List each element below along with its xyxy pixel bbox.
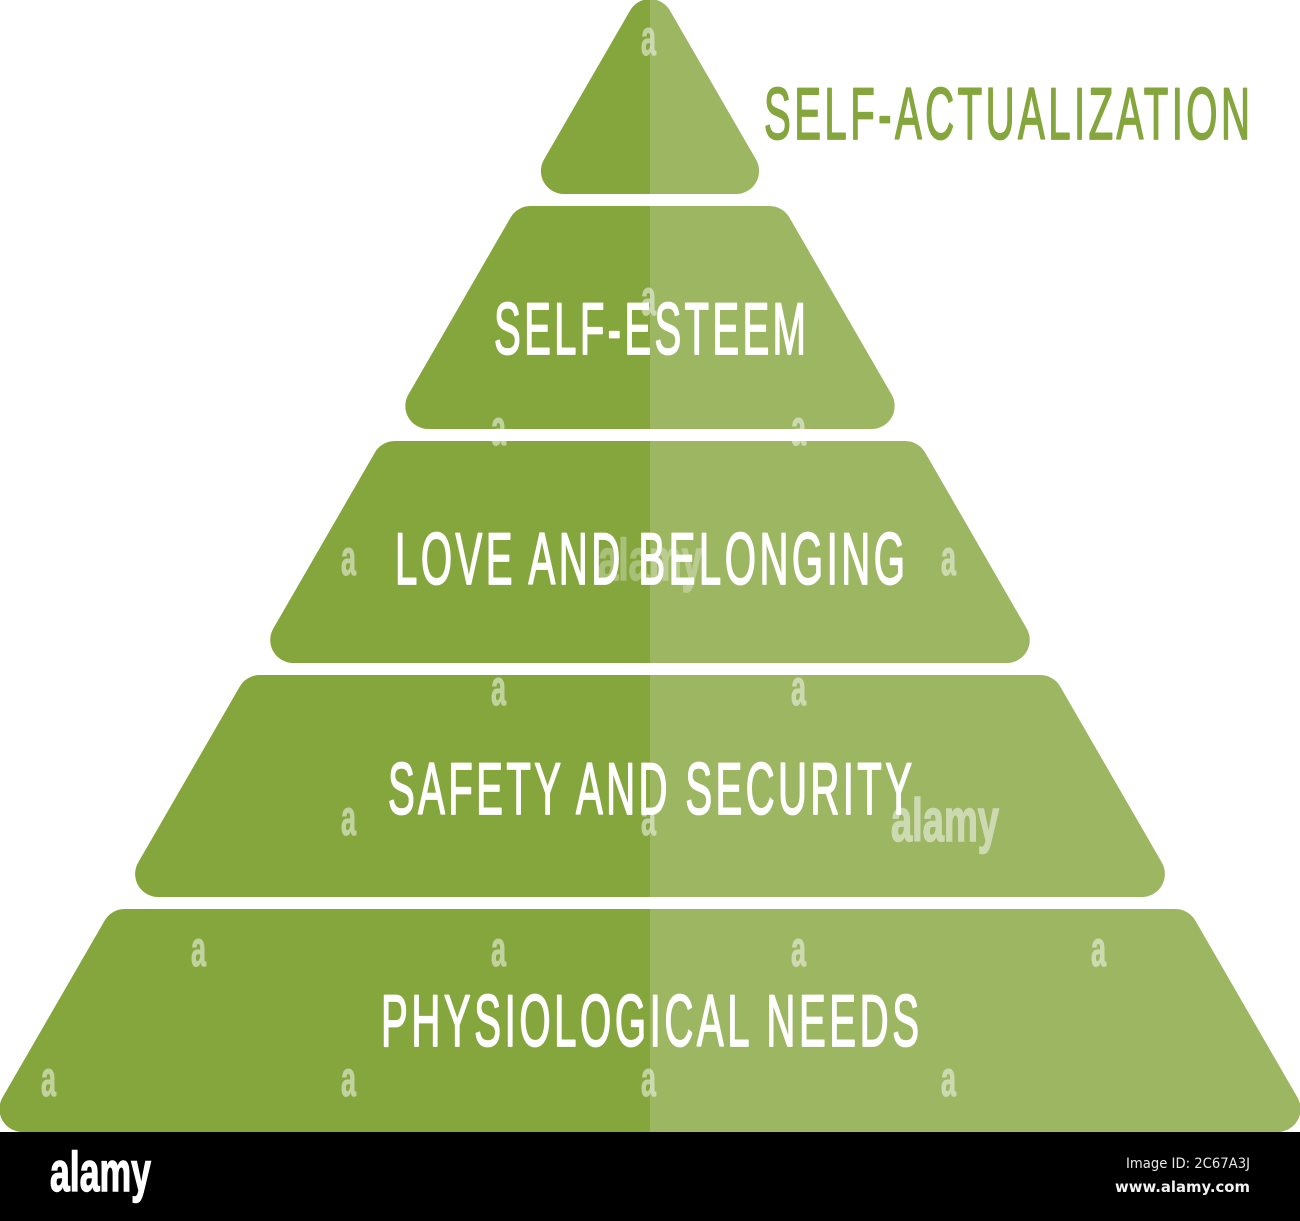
watermark pattern: a [641,10,657,66]
watermark pattern: a [791,400,807,456]
watermark pattern: a [491,400,507,456]
watermark pattern: a [641,270,657,326]
watermark pattern: a [491,921,507,977]
watermark pattern: a [191,921,207,977]
watermark pattern: a [791,921,807,977]
watermark pattern: a [491,660,507,716]
label: safety and security: SAFETY AND SECURITY [388,750,912,830]
watermark pattern: a [341,1051,357,1107]
footer logo: alamy [50,1140,151,1203]
watermark pattern: a [941,530,957,586]
label: self-esteem: SELF-ESTEEM [494,290,806,370]
heading: self-actualization: SELF-ACTUALIZATION [764,75,1250,155]
watermark pattern: a [41,1051,57,1107]
footer: website: www.alamy.com [1115,1178,1250,1196]
footer band [0,1132,1300,1221]
watermark pattern: a [341,790,357,846]
watermark: lower right logo: alamy [891,787,999,854]
watermark pattern: a [641,1051,657,1107]
watermark pattern [41,10,1107,1107]
watermark pattern: a [641,790,657,846]
label: love and belonging: LOVE AND BELONGING [395,520,905,600]
tier 1: self-actualization apex [541,0,759,194]
watermark pattern: a [791,660,807,716]
footer: image id: Image ID: 2C67A3J [1126,1156,1250,1172]
tier 4: safety and security [135,675,1165,897]
watermark: center logo: alamy [598,528,702,593]
watermark pattern: a [941,1051,957,1107]
tier 2: self-esteem [405,206,895,429]
watermark pattern: a [1091,921,1107,977]
label: physiological needs: PHYSIOLOGICAL NEEDS [381,982,919,1062]
tier 3: love and belonging [270,441,1030,663]
watermark pattern: a [341,530,357,586]
tier 5: physiological needs [0,909,1300,1132]
